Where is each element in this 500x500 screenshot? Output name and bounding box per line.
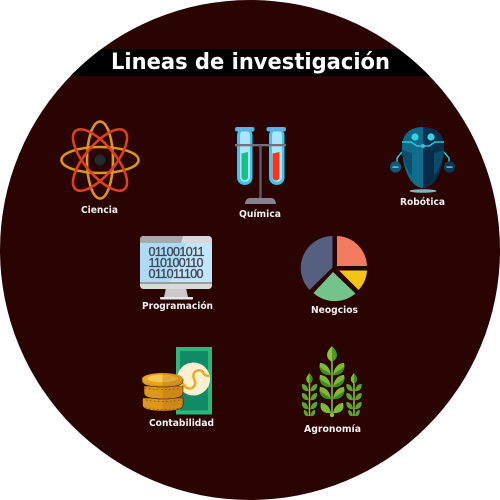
label: Robótica: Robótica	[400, 197, 445, 208]
icon: money and coins	[142, 347, 212, 414]
icon: monitor: 110100110	[148, 256, 204, 270]
icon: monitor: 011001011	[148, 245, 205, 259]
icon: test tubes	[235, 127, 286, 204]
label: Agronomía: Agronomía	[304, 424, 361, 435]
icon: monitor: 011011100	[148, 267, 204, 281]
icon: plants	[302, 346, 362, 417]
icon: atom	[62, 121, 138, 199]
label: Contabilidad: Contabilidad	[149, 418, 214, 429]
title: Lineas de investigación	[111, 49, 390, 75]
label: Neogcios: Neogcios	[311, 305, 358, 316]
icon: pie chart	[301, 236, 367, 301]
icon: monitor	[140, 236, 212, 300]
label: Programación: Programación	[142, 301, 213, 312]
label: Ciencia: Ciencia	[81, 205, 118, 216]
label: Química: Química	[239, 209, 281, 220]
icon: robot	[390, 127, 455, 193]
